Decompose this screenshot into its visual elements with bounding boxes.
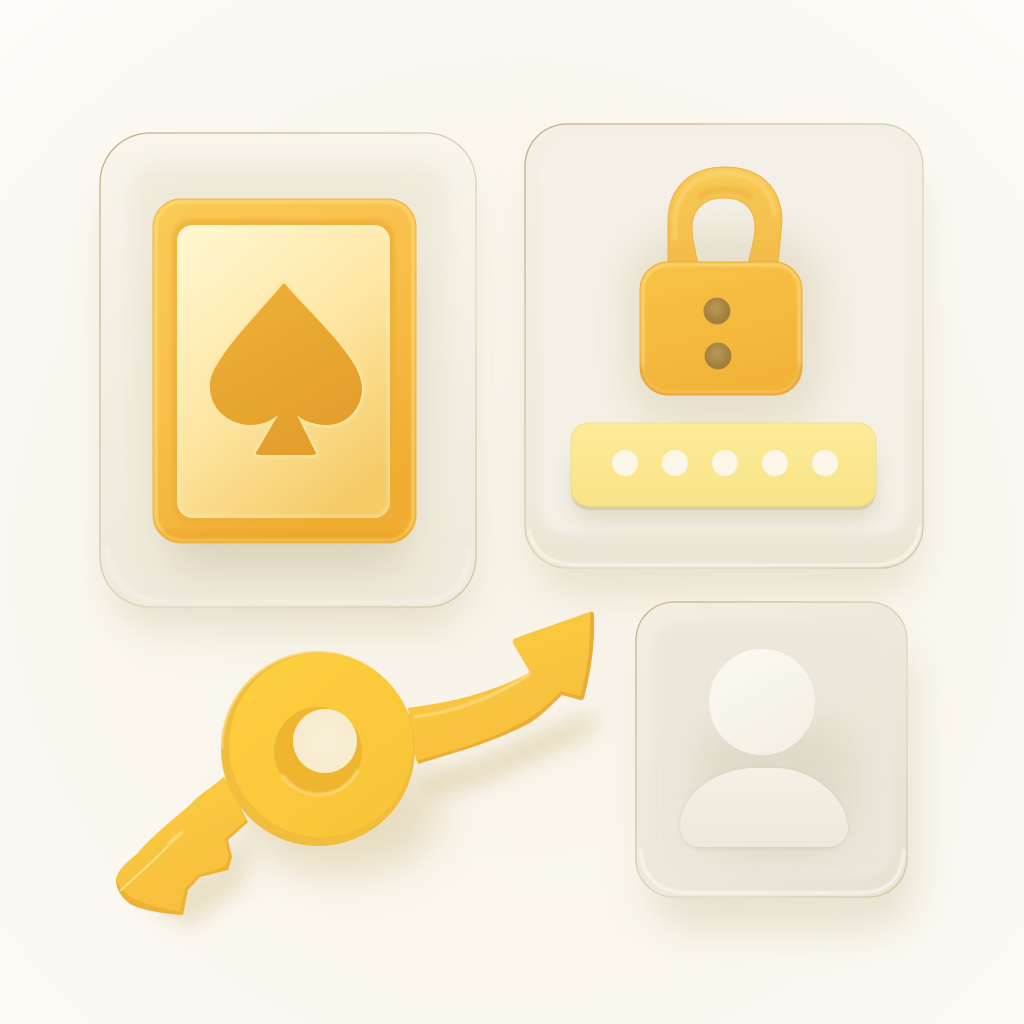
icon: key with arrow shaft	[116, 612, 600, 928]
lock shackle	[668, 167, 782, 264]
icon: user torso	[680, 768, 848, 849]
panel: playing card glass tile	[100, 133, 476, 630]
icon: spade	[210, 284, 362, 455]
panel: lock and password glass tile	[525, 124, 923, 595]
lock screw top	[704, 298, 730, 324]
key ring	[221, 652, 415, 846]
icon: user head	[709, 649, 815, 755]
key hole	[293, 709, 357, 773]
key teeth stem	[116, 777, 248, 915]
lock body	[640, 262, 802, 395]
password field	[571, 423, 876, 510]
icon: padlock	[640, 167, 802, 396]
lock screw bottom	[705, 343, 731, 369]
key shaft and arrow tip	[408, 612, 594, 764]
panel: user profile glass tile	[636, 602, 915, 930]
card: spade playing card	[153, 199, 416, 544]
